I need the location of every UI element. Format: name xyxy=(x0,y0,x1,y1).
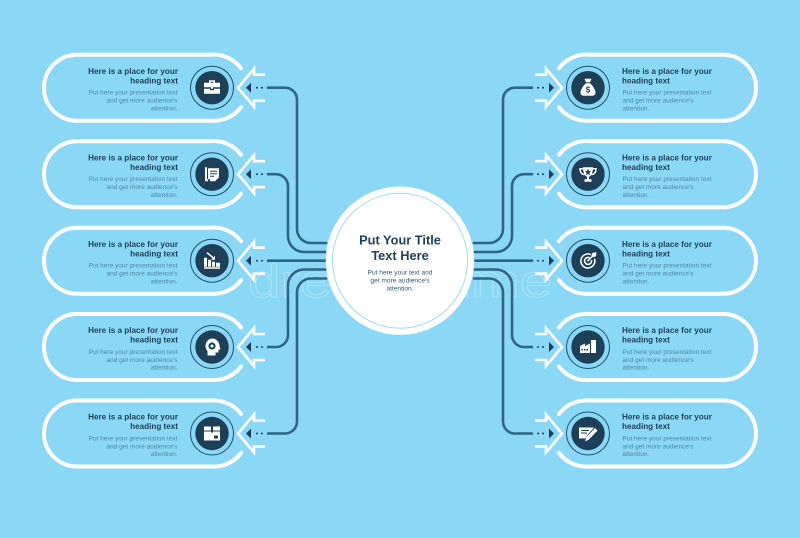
right item 3: target: and get more audience's xyxy=(622,271,694,278)
right item 2: trophy: Here is a place for your xyxy=(622,153,713,162)
left item 2: documents: heading text xyxy=(130,163,178,172)
left item 2: documents: attention. xyxy=(151,192,178,199)
left item 1: briefcase: Put here your presentation text xyxy=(89,90,178,97)
right item 1: money bag: Here is a place for your xyxy=(622,67,713,76)
connector lines: left xyxy=(268,88,326,433)
right item 2: trophy: Put here your presentation text xyxy=(622,176,712,183)
icon: factory xyxy=(580,340,596,353)
right item 4: factory: Put here your presentation text xyxy=(622,349,712,356)
left item 3: bar chart: and get more audience's xyxy=(107,271,178,278)
right item 3: target xyxy=(535,228,756,294)
right item 1: money bag: attention. xyxy=(622,105,649,112)
left item 3: bar chart: Put here your presentation text xyxy=(89,263,178,270)
right item 1: money bag: Put here your presentation text xyxy=(622,90,712,97)
right item 3: target: heading text xyxy=(622,249,670,258)
left item 1: briefcase: Here is a place for your xyxy=(88,67,179,76)
right item 2: trophy xyxy=(535,141,756,207)
icon: contract and pen xyxy=(579,428,598,442)
left item 1: briefcase xyxy=(44,55,265,121)
center body text: Put here your text and xyxy=(368,270,433,276)
left item 1: briefcase: and get more audience's xyxy=(107,98,178,105)
central circle: attention. xyxy=(386,286,414,292)
right item 4: factory xyxy=(535,314,756,380)
left item 2: documents xyxy=(44,141,265,207)
left item 4: head with gear: and get more audience's xyxy=(107,357,178,364)
right item 4: factory: Here is a place for your xyxy=(622,326,713,335)
right item 3: target: attention. xyxy=(622,278,649,285)
icon: head with gear xyxy=(206,338,220,356)
icon: falling bar chart xyxy=(204,253,220,269)
icon: money bag xyxy=(580,79,596,96)
left item 1: briefcase: heading text xyxy=(130,76,178,85)
left item 4: head with gear xyxy=(44,314,265,380)
right item 5: contract and pen: attention. xyxy=(622,451,649,458)
icon: trophy xyxy=(580,167,596,182)
watermark xyxy=(248,246,552,307)
right item 3: target: Here is a place for your xyxy=(622,240,713,249)
left item 5: box: heading text xyxy=(130,422,178,431)
left item 5: box: and get more audience's xyxy=(107,444,178,450)
icon: briefcase xyxy=(204,80,220,94)
left item 3: bar chart xyxy=(44,228,265,294)
right item 1: money bag xyxy=(535,55,756,121)
central circle: get more audience's xyxy=(370,278,430,284)
right item 5: contract and pen xyxy=(535,400,756,467)
central circle xyxy=(326,187,474,335)
left item 3: bar chart: attention. xyxy=(151,278,178,285)
left item 2: documents: and get more audience's xyxy=(107,184,178,191)
right item 4: factory: and get more audience's xyxy=(622,357,694,364)
left item 3: bar chart: heading text xyxy=(130,249,178,258)
left item 4: head with gear: attention. xyxy=(151,365,178,372)
right item 2: trophy: heading text xyxy=(622,163,670,172)
left item 4: head with gear: heading text xyxy=(130,336,178,345)
connector lines: right xyxy=(474,88,532,433)
left item 5: box: attention. xyxy=(151,451,178,458)
left item 5: box: Here is a place for your xyxy=(88,413,179,422)
right item 4: factory: attention. xyxy=(622,365,649,372)
left item 5: box: Put here your presentation text xyxy=(89,436,178,442)
icon: target with arrow xyxy=(581,252,596,268)
right item 2: trophy: and get more audience's xyxy=(622,184,694,191)
left item 3: bar chart: Here is a place for your xyxy=(88,240,179,249)
right item 1: money bag: and get more audience's xyxy=(622,98,694,105)
left item 4: head with gear: Put here your presentation text xyxy=(89,349,178,356)
right item 2: trophy: attention. xyxy=(622,192,649,199)
central circle: Text Here xyxy=(371,248,429,263)
right item 1: money bag: heading text xyxy=(622,76,670,85)
center title: Put Your Title xyxy=(359,232,441,248)
right item 5: contract and pen: and get more audience's xyxy=(622,444,694,450)
icon: documents xyxy=(205,167,219,181)
left item 4: head with gear: Here is a place for your xyxy=(88,326,179,335)
right item 3: target: Put here your presentation text xyxy=(622,263,712,270)
left item 2: documents: Here is a place for your xyxy=(88,153,179,162)
right item 5: contract and pen: heading text xyxy=(622,422,670,431)
left item 1: briefcase: attention. xyxy=(151,105,178,112)
right item 5: contract and pen: Here is a place for your xyxy=(622,413,713,422)
icon: money bag: $ xyxy=(586,86,591,95)
watermark: dreamstime xyxy=(248,255,552,307)
icon: package box xyxy=(204,426,220,440)
left item 5: box xyxy=(44,400,265,467)
right item 5: contract and pen: Put here your presentation text xyxy=(622,436,712,442)
left item 2: documents: Put here your presentation text xyxy=(89,176,178,183)
right item 4: factory: heading text xyxy=(622,336,670,345)
